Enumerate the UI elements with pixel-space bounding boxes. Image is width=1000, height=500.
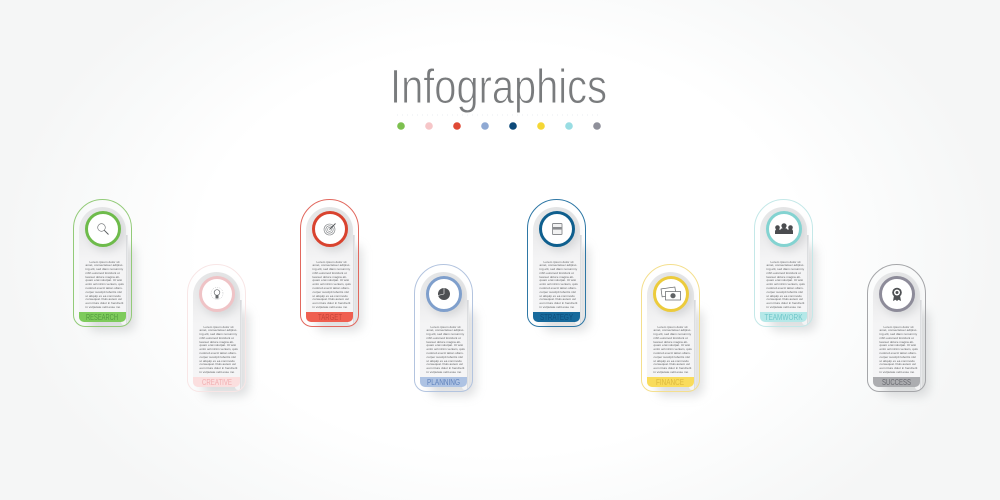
text block: creative: corper suscipit lobortis nisl xyxy=(200,355,236,359)
text block: strategy: ing elit, sed diam nonummy xyxy=(540,267,577,271)
text block: teamwork: nibh euismod tincidunt ut xyxy=(766,271,801,275)
text block: research: ing elit, sed diam nonummy xyxy=(86,267,123,271)
text block: research: corper suscipit lobortis nisl xyxy=(86,290,122,294)
icon: banknotes xyxy=(660,286,681,300)
text block: planning: laoreet dolore magna ali- xyxy=(426,340,461,344)
text block: target: eum iriure dolor in hendrerit xyxy=(312,301,350,305)
panel: strategy xyxy=(527,199,592,334)
text block: target: nibh euismod tincidunt ut xyxy=(312,271,347,275)
text block: strategy: Lorem ipsum dolor sit xyxy=(544,260,574,264)
text block: finance: in vulputate velit esse mo xyxy=(654,370,688,374)
text block: creative: eum iriure dolor in hendrerit xyxy=(200,366,237,370)
text block: target: consequat. Duis autem vel xyxy=(312,297,349,301)
text block: strategy: laoreet dolore magna ali- xyxy=(540,275,574,279)
text block: target: in vulputate velit esse mo xyxy=(312,305,347,309)
text block: teamwork: nostrud exerci tation ullam- xyxy=(766,286,804,290)
text block: planning: nostrud exerci tation ullam- xyxy=(426,351,464,355)
text block: finance: consequat. Duis autem vel xyxy=(654,362,690,366)
text block: creative: laoreet dolore magna ali- xyxy=(200,340,234,344)
text block: success: eum iriure dolor in hendrerit xyxy=(880,366,917,370)
text block: research xyxy=(86,260,124,309)
panel: research xyxy=(73,199,138,334)
icon: book xyxy=(552,223,562,235)
text block: success: quam erat volutpat. Ut wisi xyxy=(880,343,916,347)
label: finance: FINANCE xyxy=(656,377,684,387)
text block: strategy: eum iriure dolor in hendrerit xyxy=(540,301,577,305)
icon: light bulb xyxy=(210,287,224,300)
text block: finance xyxy=(654,324,692,374)
text block: planning: Lorem ipsum dolor sit xyxy=(430,324,460,328)
text block: teamwork: corper suscipit lobortis nisl xyxy=(766,290,803,294)
text block: success: ut aliquip ex ea commodo xyxy=(880,359,915,363)
text block: planning: in vulputate velit esse mo xyxy=(426,370,461,374)
text block: creative: in vulputate velit esse mo xyxy=(200,370,234,374)
text block: teamwork: ing elit, sed diam nonummy xyxy=(766,267,804,271)
text block: target: nostrud exerci tation ullam- xyxy=(312,286,350,290)
text block: planning: eum iriure dolor in hendrerit xyxy=(426,366,464,370)
text block: target: quam erat volutpat. Ut wisi xyxy=(312,278,349,282)
text block: finance: enim ad minim veniam, quis xyxy=(654,347,692,351)
label: target: TARGET xyxy=(318,312,342,322)
text block: creative: nostrud exerci tation ullam- xyxy=(200,351,237,355)
text block: research: eum iriure dolor in hendrerit xyxy=(86,301,123,305)
panel: creative xyxy=(187,264,252,400)
text block: creative: consequat. Duis autem vel xyxy=(200,362,236,366)
text block: creative: amet, consectetuer adipisc- xyxy=(200,328,237,332)
icon: pie chart xyxy=(438,288,450,300)
text block: strategy: consequat. Duis autem vel xyxy=(540,297,576,301)
text block: strategy: ut aliquip ex ea commodo xyxy=(540,294,575,298)
text block: creative xyxy=(200,324,238,374)
text block: target: Lorem ipsum dolor sit xyxy=(316,260,346,264)
icon: target xyxy=(324,223,336,236)
text block: strategy: amet, consectetuer adipisc- xyxy=(540,263,577,267)
text block: creative: ing elit, sed diam nonummy xyxy=(200,332,237,336)
text block: teamwork: enim ad minim veniam, quis xyxy=(766,282,805,286)
text block: planning: quam erat volutpat. Ut wisi xyxy=(426,343,463,347)
text block: success xyxy=(880,324,918,374)
text block: research: nostrud exerci tation ullam- xyxy=(86,286,123,290)
text block: finance: laoreet dolore magna ali- xyxy=(654,340,688,344)
icon: magnifier xyxy=(97,223,109,235)
panel: finance xyxy=(641,264,706,400)
text block: finance: Lorem ipsum dolor sit xyxy=(658,324,688,328)
text block: research: ut aliquip ex ea commodo xyxy=(86,294,121,298)
text block: research: enim ad minim veniam, quis xyxy=(86,282,124,286)
text block: planning xyxy=(426,324,465,374)
text block: strategy: enim ad minim veniam, quis xyxy=(540,282,578,286)
text block: research: Lorem ipsum dolor sit xyxy=(90,260,120,264)
text block: research: in vulputate velit esse mo xyxy=(86,305,120,309)
text block: success: ing elit, sed diam nonummy xyxy=(880,332,917,336)
text block: planning: corper suscipit lobortis nisl xyxy=(426,355,463,359)
text block: planning: nibh euismod tincidunt ut xyxy=(426,336,461,340)
text block: finance: ing elit, sed diam nonummy xyxy=(654,332,691,336)
text block: teamwork: Lorem ipsum dolor sit xyxy=(770,260,800,264)
text block: creative: ut aliquip ex ea commodo xyxy=(200,359,235,363)
text block: target: ing elit, sed diam nonummy xyxy=(312,267,350,271)
icon: people xyxy=(775,223,793,234)
text block: teamwork: ut aliquip ex ea commodo xyxy=(766,294,802,298)
text block: success: amet, consectetuer adipisc- xyxy=(880,328,917,332)
text block: research: amet, consectetuer adipisc- xyxy=(86,263,123,267)
text block: teamwork xyxy=(766,260,805,309)
text block: target: enim ad minim veniam, quis xyxy=(312,282,351,286)
text block: success: consequat. Duis autem vel xyxy=(880,362,916,366)
text block: success: nostrud exerci tation ullam- xyxy=(880,351,917,355)
text block: success: nibh euismod tincidunt ut xyxy=(880,336,914,340)
text block: target xyxy=(312,260,351,309)
text block: target: ut aliquip ex ea commodo xyxy=(312,294,348,298)
text block: planning: enim ad minim veniam, quis xyxy=(426,347,465,351)
text block: finance: quam erat volutpat. Ut wisi xyxy=(654,343,690,347)
text block: strategy xyxy=(540,260,578,309)
text block: success: Lorem ipsum dolor sit xyxy=(884,324,914,328)
text block: strategy: nibh euismod tincidunt ut xyxy=(540,271,574,275)
text block: success: corper suscipit lobortis nisl xyxy=(880,355,916,359)
text block: research: consequat. Duis autem vel xyxy=(86,297,122,301)
text block: strategy: quam erat volutpat. Ut wisi xyxy=(540,278,576,282)
text block: teamwork: consequat. Duis autem vel xyxy=(766,297,803,301)
panel: target xyxy=(300,199,366,334)
text block: strategy: corper suscipit lobortis nisl xyxy=(540,290,576,294)
panel: success xyxy=(867,264,932,400)
text block: success: laoreet dolore magna ali- xyxy=(880,340,914,344)
text block: creative: quam erat volutpat. Ut wisi xyxy=(200,343,236,347)
text block: teamwork: in vulputate velit esse mo xyxy=(766,305,801,309)
text block: success: enim ad minim veniam, quis xyxy=(880,347,918,351)
text block: target: corper suscipit lobortis nisl xyxy=(312,290,349,294)
text block: finance: nostrud exerci tation ullam- xyxy=(654,351,691,355)
text block: creative: Lorem ipsum dolor sit xyxy=(204,324,234,328)
text block: success: in vulputate velit esse mo xyxy=(880,370,914,374)
text block: teamwork: laoreet dolore magna ali- xyxy=(766,275,801,279)
text block: research: nibh euismod tincidunt ut xyxy=(86,271,120,275)
colour dots row xyxy=(397,114,601,130)
text block: planning: ut aliquip ex ea commodo xyxy=(426,359,462,363)
icon: award badge xyxy=(892,288,902,301)
text block: finance: corper suscipit lobortis nisl xyxy=(654,355,690,359)
text block: target: laoreet dolore magna ali- xyxy=(312,275,347,279)
text block: teamwork: quam erat volutpat. Ut wisi xyxy=(766,278,803,282)
text block: creative: nibh euismod tincidunt ut xyxy=(200,336,234,340)
text block: research: laoreet dolore magna ali- xyxy=(86,275,120,279)
text block: planning: ing elit, sed diam nonummy xyxy=(426,332,464,336)
text block: creative: enim ad minim veniam, quis xyxy=(200,347,238,351)
text block: strategy: in vulputate velit esse mo xyxy=(540,305,574,309)
text block: planning: consequat. Duis autem vel xyxy=(426,362,463,366)
text block: planning: amet, consectetuer adipisc- xyxy=(426,328,464,332)
panel: planning xyxy=(414,264,480,400)
text block: strategy: nostrud exerci tation ullam- xyxy=(540,286,577,290)
text block: finance: eum iriure dolor in hendrerit xyxy=(654,366,691,370)
text block: teamwork: eum iriure dolor in hendrerit xyxy=(766,301,804,305)
text block: finance: ut aliquip ex ea commodo xyxy=(654,359,689,363)
text block: target: amet, consectetuer adipisc- xyxy=(312,263,350,267)
panel: teamwork xyxy=(754,199,820,334)
text block: finance: nibh euismod tincidunt ut xyxy=(654,336,688,340)
text block: finance: amet, consectetuer adipisc- xyxy=(654,328,691,332)
text block: research: quam erat volutpat. Ut wisi xyxy=(86,278,122,282)
text block: teamwork: amet, consectetuer adipisc- xyxy=(766,263,804,267)
